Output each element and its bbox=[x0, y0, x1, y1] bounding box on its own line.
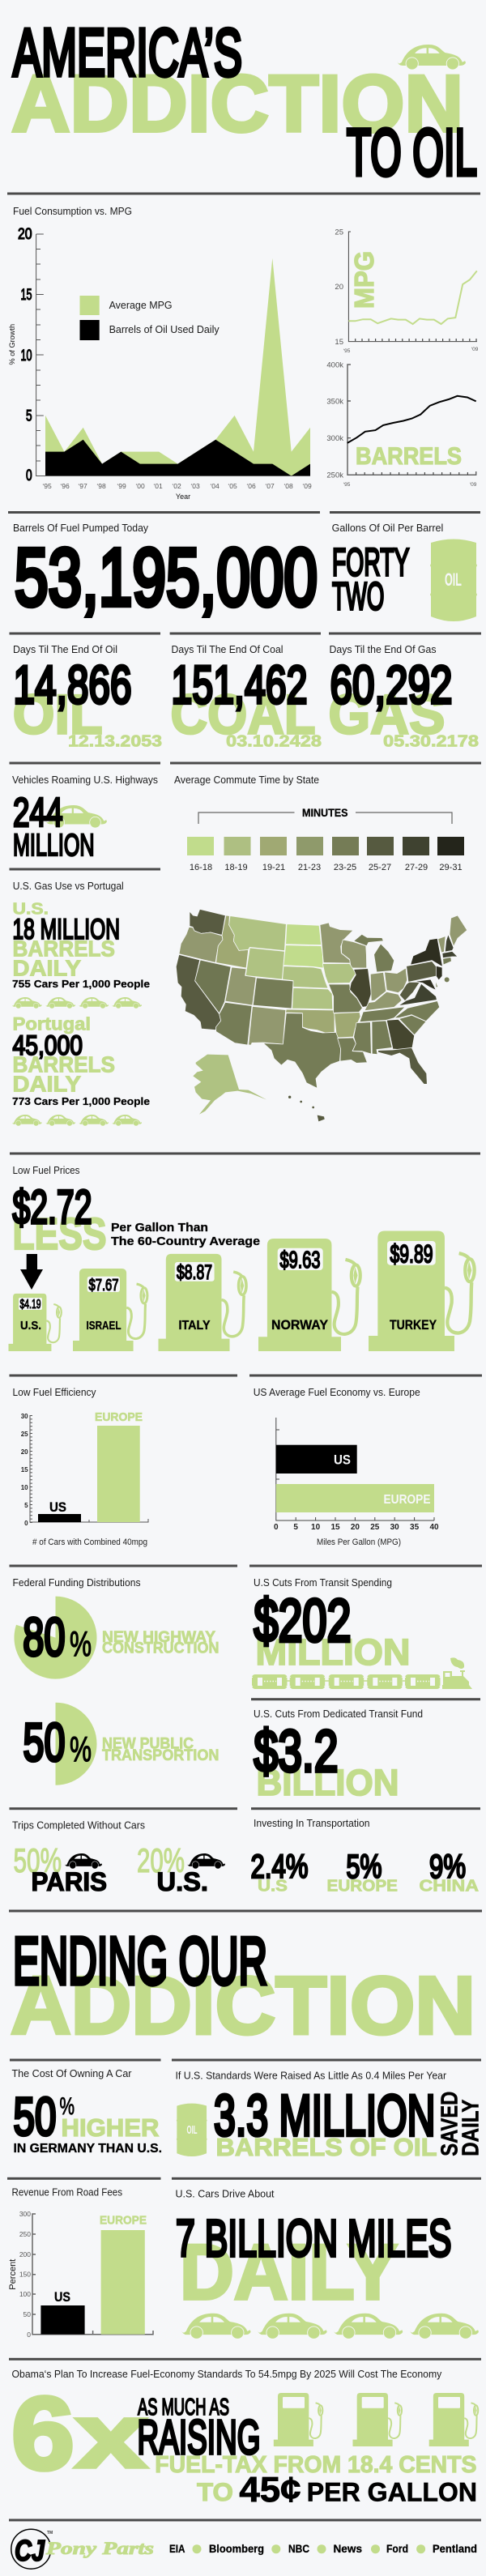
pump: U.S.: $4.19 bbox=[19, 1298, 41, 1311]
sources list: Bloomberg bbox=[209, 2542, 264, 2555]
horizontal bar chart: miles per gallon bbox=[274, 1418, 439, 1547]
panel heading: Investing In Transportation bbox=[254, 1817, 369, 1829]
stat: U.S.: 18 MILLION bbox=[13, 913, 120, 945]
heading word: ADDICTION: ADDICTION bbox=[11, 1961, 475, 2052]
green word: DAILY: DAILY bbox=[180, 2229, 398, 2316]
area chart: percent of growth: ‘96 bbox=[60, 482, 70, 490]
value: forty two: FORTY bbox=[332, 541, 409, 585]
number of days: 14,866 bbox=[13, 655, 131, 714]
panel: vehicles roaming U.S. highways bbox=[12, 774, 158, 863]
bar chart: cars with combined 40mpg: 25 bbox=[21, 1431, 28, 1438]
panel: US average fuel economy vs Europe bbox=[254, 1386, 439, 1547]
panel: trips completed without cars bbox=[12, 1819, 225, 1896]
horizontal bar chart: miles per gallon: 15 bbox=[330, 1523, 340, 1532]
panel heading: Barrels Of Fuel Pumped Today bbox=[13, 522, 148, 534]
panel heading: U.S. Gas Use vs Portugal bbox=[13, 880, 124, 892]
bar chart: percent revenue: EUROPE bbox=[100, 2214, 147, 2228]
line chart: MPG: 15 bbox=[335, 338, 343, 347]
area chart: percent of growth: ‘03 bbox=[190, 482, 200, 490]
arrow bbox=[20, 1254, 43, 1290]
panel: revenue from road fees bbox=[8, 2186, 153, 2339]
legend swatches: 23-25 bbox=[334, 863, 356, 872]
stat: U.S.: U.S. bbox=[157, 1867, 208, 1896]
horizontal bar chart: miles per gallon: 30 bbox=[390, 1523, 399, 1532]
pump: Israel bbox=[73, 1269, 147, 1351]
logo: CJ Pony Parts: TM bbox=[47, 2531, 53, 2535]
sources list: Ford bbox=[386, 2542, 408, 2555]
stat: Europe bbox=[327, 1848, 398, 1896]
panel: gallons of oil per barrel bbox=[332, 522, 477, 621]
pie: 50 percent new public transportation bbox=[23, 1703, 219, 1785]
panel: U.S cuts from transit spending bbox=[252, 1576, 472, 1689]
heading: Ending Our Addiction bbox=[11, 1923, 475, 2052]
panel heading: Low Fuel Prices bbox=[13, 1164, 80, 1176]
icon: oil barrel: OIL bbox=[445, 569, 462, 590]
bar chart: percent revenue: Percent bbox=[8, 2259, 18, 2290]
icon: oil barrel bbox=[177, 2104, 207, 2156]
pie: 50 percent new public transportation: NEW PUBLIC bbox=[102, 1736, 194, 1753]
text: as much as raising bbox=[138, 2395, 261, 2464]
icon: oil barrel bbox=[430, 540, 477, 621]
value: forty two bbox=[332, 541, 409, 619]
bar chart: cars with combined 40mpg: 15 bbox=[21, 1466, 28, 1474]
big green 6x: 6 bbox=[11, 2376, 75, 2492]
panel: days til the end of oil bbox=[13, 643, 162, 750]
chart legend: Barrels of Oil Used Daily bbox=[109, 323, 220, 335]
pie: 80 percent new highway construction: % bbox=[70, 1624, 92, 1664]
pump: Norway bbox=[258, 1239, 360, 1351]
icon: train bbox=[252, 1657, 472, 1689]
horizontal bar chart: miles per gallon: EUROPE bbox=[384, 1493, 431, 1507]
pump: Italy: ITALY bbox=[178, 1319, 211, 1333]
line chart: barrels: 300k bbox=[326, 434, 343, 443]
pie: 50 percent new public transportation: 50 bbox=[23, 1712, 65, 1772]
bar chart: percent revenue: 300 bbox=[19, 2210, 31, 2218]
stat: Paris: 50% bbox=[13, 1841, 62, 1879]
panel heading: If U.S. Standards Were Raised As Little As 0.4 Miles Per Year bbox=[175, 2070, 447, 2082]
horizontal bar chart: miles per gallon: US bbox=[334, 1452, 351, 1468]
line chart: barrels: BARRELS bbox=[356, 443, 462, 470]
callout text: Per Gallon Than bbox=[111, 1221, 208, 1235]
value: 244 million: MILLION bbox=[13, 829, 94, 863]
pie: 80 percent new highway construction bbox=[14, 1597, 219, 1679]
legend swatches bbox=[187, 837, 464, 872]
panel heading: Days Til The End Of Coal bbox=[172, 643, 284, 655]
stat: 50 percent higher: % bbox=[60, 2093, 75, 2120]
text: as much as raising: RAISING bbox=[138, 2411, 261, 2464]
horizontal bar chart: miles per gallon: 35 bbox=[410, 1523, 420, 1532]
green word: GAS bbox=[329, 684, 446, 745]
icons: four cars bbox=[12, 1115, 142, 1126]
big price: $2.72 bbox=[13, 1181, 92, 1234]
sources list bbox=[169, 2542, 477, 2555]
panel heading: The Cost Of Owning A Car bbox=[11, 2067, 132, 2079]
text: to 45 cents per gallon bbox=[197, 2470, 477, 2510]
area chart: percent of growth: 15 bbox=[21, 286, 32, 304]
stat: Portugal: 45,000 bbox=[13, 1030, 83, 1061]
stat: U.S. bbox=[12, 899, 150, 990]
pump: Norway: $9.63 bbox=[280, 1247, 321, 1273]
text: to 45 cents per gallon: TO bbox=[197, 2478, 233, 2506]
text: as much as raising: AS MUCH AS bbox=[138, 2395, 229, 2420]
line chart: barrels: ‘95 bbox=[343, 482, 351, 488]
bar chart: percent revenue: 50 bbox=[23, 2310, 31, 2318]
bar chart: cars with combined 40mpg bbox=[21, 1410, 148, 1547]
pie: 80 percent new highway construction: CONSTRUCTION bbox=[102, 1640, 219, 1657]
stat: China bbox=[420, 1848, 479, 1896]
line chart: MPG: MPG bbox=[349, 251, 380, 309]
stat: U.S.: U.S. bbox=[13, 899, 49, 919]
legend swatches: 27-29 bbox=[405, 863, 428, 872]
icon: beetle car bbox=[45, 805, 107, 828]
panel: Obama's fuel economy plan bbox=[11, 2368, 478, 2510]
area chart: percent of growth: ‘09 bbox=[302, 482, 312, 490]
big number: 53,195,000 bbox=[15, 532, 318, 623]
stat: U.S.: BARRELS bbox=[13, 936, 115, 961]
bar chart: cars with combined 40mpg: # of Cars with Combined 40mpg bbox=[32, 1537, 147, 1547]
panel: average commute time legend bbox=[174, 774, 464, 872]
pie: 80 percent new highway construction: 80 bbox=[23, 1607, 65, 1667]
pump: U.S. bbox=[8, 1294, 62, 1351]
panel: U.S. cars drive about bbox=[175, 2188, 479, 2339]
bar chart: cars with combined 40mpg: 0 bbox=[24, 1520, 28, 1527]
heading word: AMERICA'S: AMERICA’S bbox=[13, 15, 242, 90]
stat: China: CHINA bbox=[420, 1876, 479, 1896]
stat: U.S.: DAILY bbox=[13, 956, 81, 980]
icons: four cars bbox=[12, 997, 142, 1009]
end date: 03.10.2428 bbox=[226, 732, 322, 750]
area chart: percent of growth: 0 bbox=[26, 467, 32, 484]
stat: 50 percent higher: 50 bbox=[13, 2087, 57, 2147]
legend title: MINUTES bbox=[302, 807, 348, 819]
stat: U.S.: 755 Cars Per 1,000 People bbox=[12, 978, 150, 990]
stat: U.S. bbox=[137, 1841, 225, 1896]
callout text bbox=[111, 1221, 260, 1248]
number of days: 151,462 bbox=[172, 655, 308, 714]
panel heading: Average Commute Time by State bbox=[174, 774, 319, 786]
stat: Europe: 5% bbox=[347, 1848, 382, 1885]
pump: Turkey: $9.89 bbox=[390, 1239, 433, 1269]
big number: $3.2 bbox=[254, 1719, 339, 1784]
value: forty two: TWO bbox=[332, 575, 384, 619]
pump: U.S.: U.S. bbox=[20, 1320, 41, 1333]
panel heading: Days Til The End Of Oil bbox=[13, 643, 117, 655]
stat: Portugal bbox=[12, 1014, 150, 1107]
bar chart: percent revenue: 100 bbox=[19, 2290, 31, 2298]
big number: $202 bbox=[254, 1587, 352, 1654]
bar chart: percent revenue: 0 bbox=[27, 2331, 31, 2339]
panel heading: Low Fuel Efficiency bbox=[13, 1386, 96, 1398]
pie: 50 percent new public transportation: TRANSPORTION bbox=[102, 1747, 219, 1764]
stat: Portugal: BARRELS bbox=[13, 1051, 115, 1077]
text: to 45 cents per gallon: PER GALLON bbox=[307, 2477, 477, 2506]
bar chart: percent revenue: 250 bbox=[19, 2230, 31, 2238]
callout text: The 60-Country Average bbox=[111, 1235, 260, 1248]
pie: 80 percent new highway construction: NEW HIGHWAY bbox=[102, 1629, 215, 1646]
bar chart: percent revenue: US bbox=[54, 2290, 70, 2305]
area chart: percent of growth: 5 bbox=[26, 407, 32, 424]
bar chart: cars with combined 40mpg: EUROPE bbox=[95, 1410, 143, 1424]
pump: Turkey: TURKEY bbox=[390, 1317, 437, 1333]
horizontal bar chart: miles per gallon: 5 bbox=[293, 1523, 298, 1532]
panel: U.S. cuts from dedicated transit fund bbox=[254, 1708, 423, 1803]
big green 6x: x bbox=[75, 2385, 147, 2487]
end date: 12.13.2053 bbox=[68, 732, 162, 750]
sources list: NBC bbox=[288, 2542, 309, 2555]
stat: 50 percent higher: IN GERMANY THAN U.S. bbox=[13, 2142, 162, 2156]
line chart: barrels: 250k bbox=[326, 471, 343, 480]
pump: Italy: $8.87 bbox=[177, 1261, 212, 1284]
green word: COAL bbox=[170, 684, 316, 745]
panel: if U.S. standards were raised bbox=[175, 2070, 484, 2161]
horizontal bar chart: miles per gallon: Miles Per Gallon (MPG) bbox=[317, 1537, 401, 1547]
bar chart: percent revenue bbox=[8, 2210, 153, 2339]
area chart: percent of growth: ‘99 bbox=[117, 482, 126, 490]
stat: Portugal: DAILY bbox=[13, 1071, 81, 1097]
stat: Portugal: Portugal bbox=[13, 1014, 91, 1034]
line chart: MPG: 25 bbox=[335, 228, 343, 237]
panel heading: Gallons Of Oil Per Barrel bbox=[332, 522, 443, 534]
rotated word: DAILY: DAILY bbox=[458, 2100, 484, 2156]
area chart: percent of growth: % of Growth bbox=[8, 324, 17, 365]
bar chart: cars with combined 40mpg: 20 bbox=[21, 1448, 28, 1456]
green word: BILLION: BILLION bbox=[256, 1762, 399, 1803]
panel: low fuel efficiency bbox=[13, 1386, 148, 1547]
area chart: percent of growth: 20 bbox=[18, 225, 32, 243]
green word: LESS: LESS bbox=[13, 1209, 107, 1259]
end date: 05.30.2178 bbox=[383, 732, 479, 750]
pump: Israel: ISRAEL bbox=[86, 1320, 122, 1333]
stat: Portugal: 773 Cars Per 1,000 People bbox=[12, 1095, 150, 1107]
legend swatches: 25-27 bbox=[369, 863, 391, 872]
horizontal bar chart: miles per gallon: 40 bbox=[429, 1523, 439, 1532]
line chart: barrels: 350k bbox=[326, 397, 343, 407]
sources list: EIA bbox=[169, 2542, 185, 2555]
panel heading: Days Til the End Of Gas bbox=[329, 643, 437, 655]
panel: U.S. gas use vs Portugal bbox=[12, 880, 150, 1126]
stat: Paris: PARIS bbox=[31, 1867, 107, 1896]
panel heading: U.S. Cars Drive About bbox=[175, 2188, 275, 2200]
area chart: percent of growth: 10 bbox=[21, 347, 32, 365]
green word: MILLION: MILLION bbox=[256, 1631, 410, 1673]
line chart: MPG bbox=[335, 228, 479, 354]
pump: Italy bbox=[158, 1254, 246, 1351]
heading word: ADDICTION: ADDICTION bbox=[11, 58, 463, 148]
panel: days til the end of coal bbox=[170, 643, 322, 750]
choropleth map: commute time by state bbox=[176, 909, 467, 1121]
area chart: percent of growth: ‘06 bbox=[246, 482, 256, 490]
area chart: percent of growth: Year bbox=[176, 493, 190, 501]
area chart: percent of growth: ‘02 bbox=[172, 482, 181, 490]
panel heading: Fuel Consumption vs. MPG bbox=[13, 205, 132, 217]
chart legend: Average MPG bbox=[109, 299, 173, 311]
big green 6x bbox=[11, 2376, 147, 2492]
stat: U.S.: 20% bbox=[137, 1841, 185, 1879]
bar chart: cars with combined 40mpg: 5 bbox=[24, 1502, 28, 1509]
panel heading: US Average Fuel Economy vs. Europe bbox=[254, 1386, 420, 1398]
area chart: percent of growth: ‘95 bbox=[42, 482, 52, 490]
stat: U.S bbox=[251, 1848, 308, 1896]
horizontal bar chart: miles per gallon: 25 bbox=[370, 1523, 380, 1532]
stat: Europe: EUROPE bbox=[327, 1876, 398, 1896]
rotated word: SAVED: SAVED bbox=[437, 2092, 463, 2156]
legend swatches: 29-31 bbox=[439, 863, 463, 872]
legend swatches: 16-18 bbox=[190, 863, 212, 872]
panel heading: Obama‘s Plan To Increase Fuel-Economy Standards To 54.5mpg By 2025 Will Cost The Economy bbox=[11, 2368, 442, 2380]
icon: beetle car bbox=[397, 45, 466, 70]
icons: four cars bbox=[181, 2314, 479, 2339]
value: 244 million bbox=[13, 790, 94, 863]
line chart: barrels: 400k bbox=[326, 361, 343, 369]
area chart: percent of growth: ‘97 bbox=[78, 482, 87, 490]
stat: U.S: 2.4% bbox=[251, 1848, 308, 1885]
heading words: ENDING OUR: ENDING OUR bbox=[13, 1923, 267, 1998]
legend swatches: 19-21 bbox=[262, 863, 285, 872]
text: to 45 cents per gallon: 45¢ bbox=[239, 2470, 301, 2510]
pump: Turkey bbox=[369, 1231, 475, 1351]
panel: fuel consumption vs MPG bbox=[8, 205, 479, 501]
area chart: percent of growth: ‘04 bbox=[210, 482, 220, 490]
sources list: Pentland bbox=[433, 2542, 477, 2555]
pump: Norway: NORWAY bbox=[271, 1317, 329, 1333]
horizontal bar chart: miles per gallon: 20 bbox=[351, 1523, 360, 1532]
panel: barrels of fuel pumped today bbox=[13, 522, 318, 623]
line chart: barrels bbox=[326, 361, 477, 488]
bar chart: percent revenue: 150 bbox=[19, 2271, 31, 2279]
area chart: percent of growth: ‘01 bbox=[153, 482, 163, 490]
bar chart: cars with combined 40mpg: US bbox=[49, 1499, 66, 1515]
stat: 50 percent higher bbox=[13, 2087, 162, 2156]
stat: China: 9% bbox=[429, 1848, 466, 1885]
area chart: percent of growth: ‘05 bbox=[228, 482, 237, 490]
panel heading: U.S Cuts From Transit Spending bbox=[254, 1576, 392, 1589]
chart legend bbox=[79, 296, 220, 340]
area chart: percent of growth: ‘98 bbox=[96, 482, 106, 490]
green text: barrels of oil: BARRELS OF OIL bbox=[215, 2135, 437, 2161]
area chart: percent of growth: ‘07 bbox=[265, 482, 275, 490]
header: America's Addiction To Oil bbox=[11, 15, 477, 190]
horizontal bar chart: miles per gallon: 10 bbox=[311, 1523, 321, 1532]
panel heading: Vehicles Roaming U.S. Highways bbox=[12, 774, 158, 786]
logo: CJ Pony Parts: Pony Parts bbox=[45, 2538, 154, 2558]
area chart: percent of growth: ‘00 bbox=[135, 482, 145, 490]
pie: 50 percent new public transportation: % bbox=[70, 1729, 92, 1769]
panel: low fuel prices bbox=[8, 1164, 475, 1351]
panel: federal funding distributions bbox=[13, 1576, 219, 1785]
panel: investing in transportation bbox=[251, 1817, 479, 1896]
stat: Paris bbox=[13, 1841, 107, 1896]
logo: CJ Pony Parts: CJ bbox=[15, 2534, 45, 2567]
text: fuel-tax: FUEL-TAX FROM 18.4 CENTS bbox=[155, 2452, 477, 2478]
panel heading: U.S. Cuts From Dedicated Transit Fund bbox=[254, 1708, 423, 1720]
value: 244 million: 244 bbox=[13, 790, 63, 835]
area chart: percent of growth bbox=[8, 225, 312, 501]
green word: OIL bbox=[13, 684, 103, 745]
line chart: MPG: ‘95 bbox=[343, 348, 351, 354]
panel: the cost of owning a car bbox=[11, 2067, 162, 2156]
bar chart: cars with combined 40mpg: 10 bbox=[21, 1484, 28, 1491]
icons: three fuel pumps bbox=[274, 2393, 478, 2446]
sources list: News bbox=[334, 2542, 362, 2555]
icon: oil barrel: OIL bbox=[186, 2124, 198, 2137]
bar chart: cars with combined 40mpg: 30 bbox=[21, 1413, 28, 1420]
bar chart: percent revenue: 200 bbox=[19, 2250, 31, 2258]
pump: Israel: $7.67 bbox=[89, 1277, 118, 1294]
legend swatches: 21-23 bbox=[298, 863, 321, 872]
line chart: MPG: ‘09 bbox=[471, 347, 479, 352]
panel heading: Revenue From Road Fees bbox=[11, 2186, 122, 2199]
panel: days til the end of gas bbox=[329, 643, 479, 750]
line chart: MPG: 20 bbox=[335, 283, 343, 292]
logo: CJ Pony Parts bbox=[11, 2529, 154, 2569]
panel heading: Federal Funding Distributions bbox=[13, 1576, 141, 1589]
panel heading: Trips Completed Without Cars bbox=[12, 1819, 145, 1832]
area chart: percent of growth: ‘08 bbox=[284, 482, 293, 490]
legend swatches: 18-19 bbox=[224, 863, 248, 872]
stat: 50 percent higher: HIGHER bbox=[62, 2115, 160, 2142]
stat: U.S: U.S bbox=[258, 1876, 288, 1896]
line chart: barrels: ‘09 bbox=[470, 482, 477, 488]
horizontal bar chart: miles per gallon: 0 bbox=[274, 1523, 279, 1532]
